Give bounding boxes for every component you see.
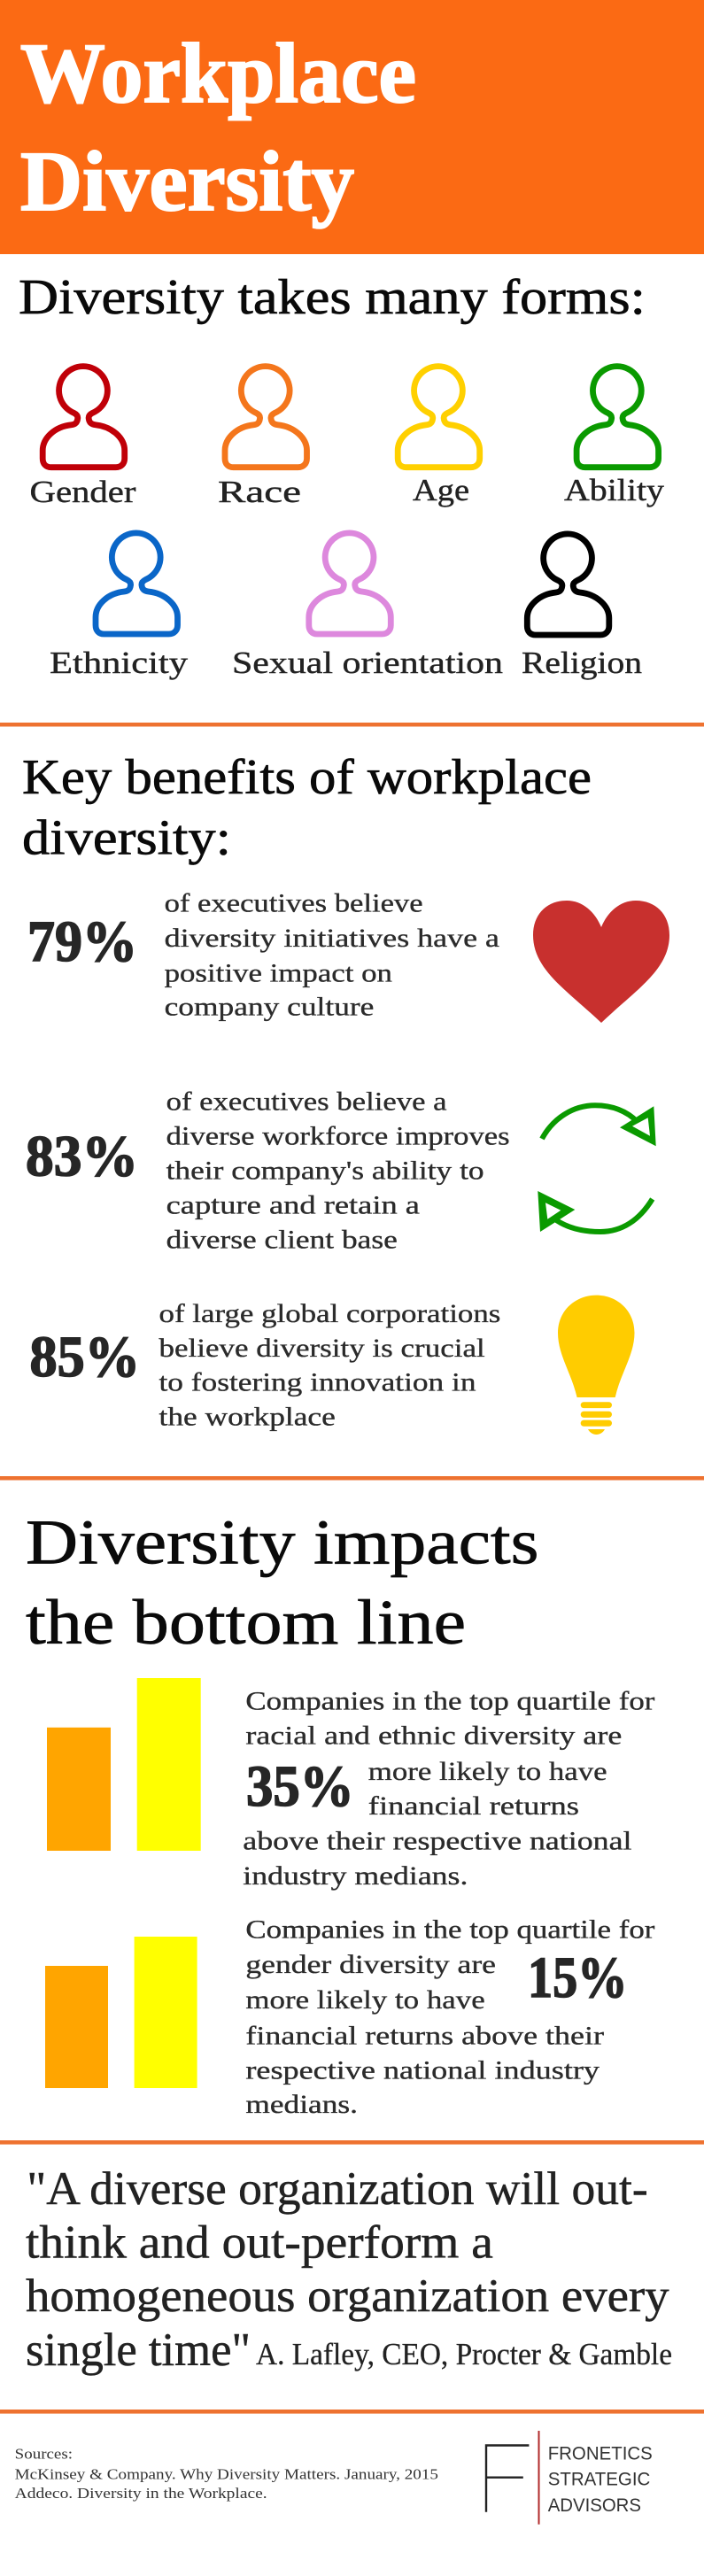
title text: Diversity <box>20 134 354 228</box>
icon: age person <box>398 367 480 468</box>
text: 83% description: of executives believe a <box>166 1087 447 1117</box>
text: gender diversity: gender diversity are <box>245 1950 496 1979</box>
label: ability: Ability <box>564 473 665 507</box>
text: gender diversity: respective national industry <box>245 2055 600 2085</box>
label: religion: Religion <box>522 646 642 680</box>
icon: ethnicity person <box>96 533 177 634</box>
logo text: fronetics strategic advisors: STRATEGIC <box>548 2470 650 2490</box>
text: 85% description: the workplace <box>159 1403 336 1432</box>
text: 83% description <box>166 1087 510 1254</box>
logo text: fronetics strategic advisors <box>548 2443 653 2516</box>
panel: key benefits <box>22 750 669 1435</box>
quote attribution: A. Lafley, CEO, Procter & Gamble <box>256 2337 672 2371</box>
icon: heart <box>533 901 669 1023</box>
text: 85% description: to fostering innovation in <box>159 1368 476 1397</box>
text: 85% description <box>159 1299 500 1432</box>
quote text: "A diverse organization will out- <box>27 2163 648 2215</box>
icon: green cycle arrows <box>538 1105 656 1232</box>
heading: diversity impacts the bottom line <box>26 1507 538 1658</box>
icon: ability person <box>576 367 659 468</box>
text: 85% description: of large global corporations <box>159 1299 500 1328</box>
label: ethnicity: Ethnicity <box>50 646 189 680</box>
text: racial and ethnic diversity: above their respective national <box>243 1826 632 1856</box>
icon: sexual orientation person <box>309 533 391 634</box>
text: racial and ethnic diversity: financial returns <box>368 1791 579 1821</box>
logo: fronetics F mark <box>486 2431 538 2525</box>
heading: diversity impacts the bottom line: the bottom line <box>26 1587 466 1658</box>
logo text: fronetics strategic advisors: FRONETICS <box>548 2443 653 2464</box>
sources: Addeco. Diversity in the Workplace. <box>15 2485 267 2502</box>
text: 83% description: diverse client base <box>166 1225 398 1254</box>
quote text <box>26 2163 669 2376</box>
text: racial and ethnic diversity: more likely to have <box>368 1757 607 1786</box>
stat: 83%: 83% <box>26 1125 138 1189</box>
label: sexual orientation: Sexual orientation <box>232 646 503 680</box>
quote text: homogeneous organization every <box>26 2270 669 2322</box>
title banner <box>0 0 704 254</box>
label: age: Age <box>413 473 469 507</box>
icon: race person <box>225 367 306 468</box>
text: 79% description <box>165 888 499 1022</box>
bar chart: gender diversity <box>45 1937 197 2088</box>
panel: bottom line <box>26 1507 654 2119</box>
text: gender diversity <box>245 1915 654 2119</box>
text: gender diversity: financial returns above their <box>245 2022 604 2051</box>
sources: Sources: <box>15 2446 73 2463</box>
heading: key benefits: Key benefits of workplace <box>22 750 592 805</box>
stat: 35%: 35% <box>246 1754 354 1819</box>
text: racial and ethnic diversity: Companies in the top quartile for <box>245 1686 654 1716</box>
text: 83% description: their company's ability to <box>166 1156 484 1185</box>
text: 85% description: believe diversity is crucial <box>159 1334 485 1363</box>
heading: diversity impacts the bottom line: Diversity impacts <box>26 1507 538 1578</box>
stat: 15%: 15% <box>528 1946 627 2010</box>
text: 79% description: of executives believe <box>165 888 423 917</box>
text: gender diversity: medians. <box>245 2090 358 2119</box>
text: 79% description: company culture <box>165 993 374 1022</box>
quote text: single time" <box>26 2325 251 2376</box>
title text: Workplace <box>20 26 416 120</box>
quote text: think and out-perform a <box>26 2216 493 2268</box>
title text <box>20 26 416 228</box>
panel: quote <box>26 2163 672 2376</box>
text: 79% description: positive impact on <box>165 958 392 987</box>
heading: diversity takes many forms: Diversity takes many forms: <box>19 270 646 325</box>
icon: religion person <box>527 534 609 635</box>
bar chart: racial and ethnic diversity <box>47 1678 201 1851</box>
heading: key benefits <box>22 750 592 866</box>
text: 83% description: capture and retain a <box>166 1190 420 1220</box>
icon: gender person <box>43 367 125 468</box>
text: 83% description: diverse workforce improves <box>166 1122 510 1151</box>
icon: light bulb <box>558 1296 634 1435</box>
heading: key benefits: diversity: <box>22 811 231 866</box>
text: gender diversity: more likely to have <box>245 1985 485 2015</box>
stat: 79%: 79% <box>27 909 137 974</box>
sources <box>15 2446 438 2502</box>
panel: forms of diversity <box>19 270 665 680</box>
panel: footer <box>15 2431 653 2525</box>
stat: 85%: 85% <box>30 1325 140 1389</box>
text: racial and ethnic diversity: industry medians. <box>243 1861 468 1891</box>
text: gender diversity: Companies in the top quartile for <box>245 1915 654 1944</box>
text: 79% description: diversity initiatives have a <box>165 924 499 953</box>
text: racial and ethnic diversity <box>243 1686 654 1891</box>
label: gender: Gender <box>30 475 136 509</box>
label: race: Race <box>218 475 301 509</box>
text: racial and ethnic diversity: racial and ethnic diversity are <box>245 1721 622 1750</box>
sources: McKinsey & Company. Why Diversity Matters. January, 2015 <box>15 2465 438 2482</box>
logo text: fronetics strategic advisors: ADVISORS <box>548 2495 641 2516</box>
